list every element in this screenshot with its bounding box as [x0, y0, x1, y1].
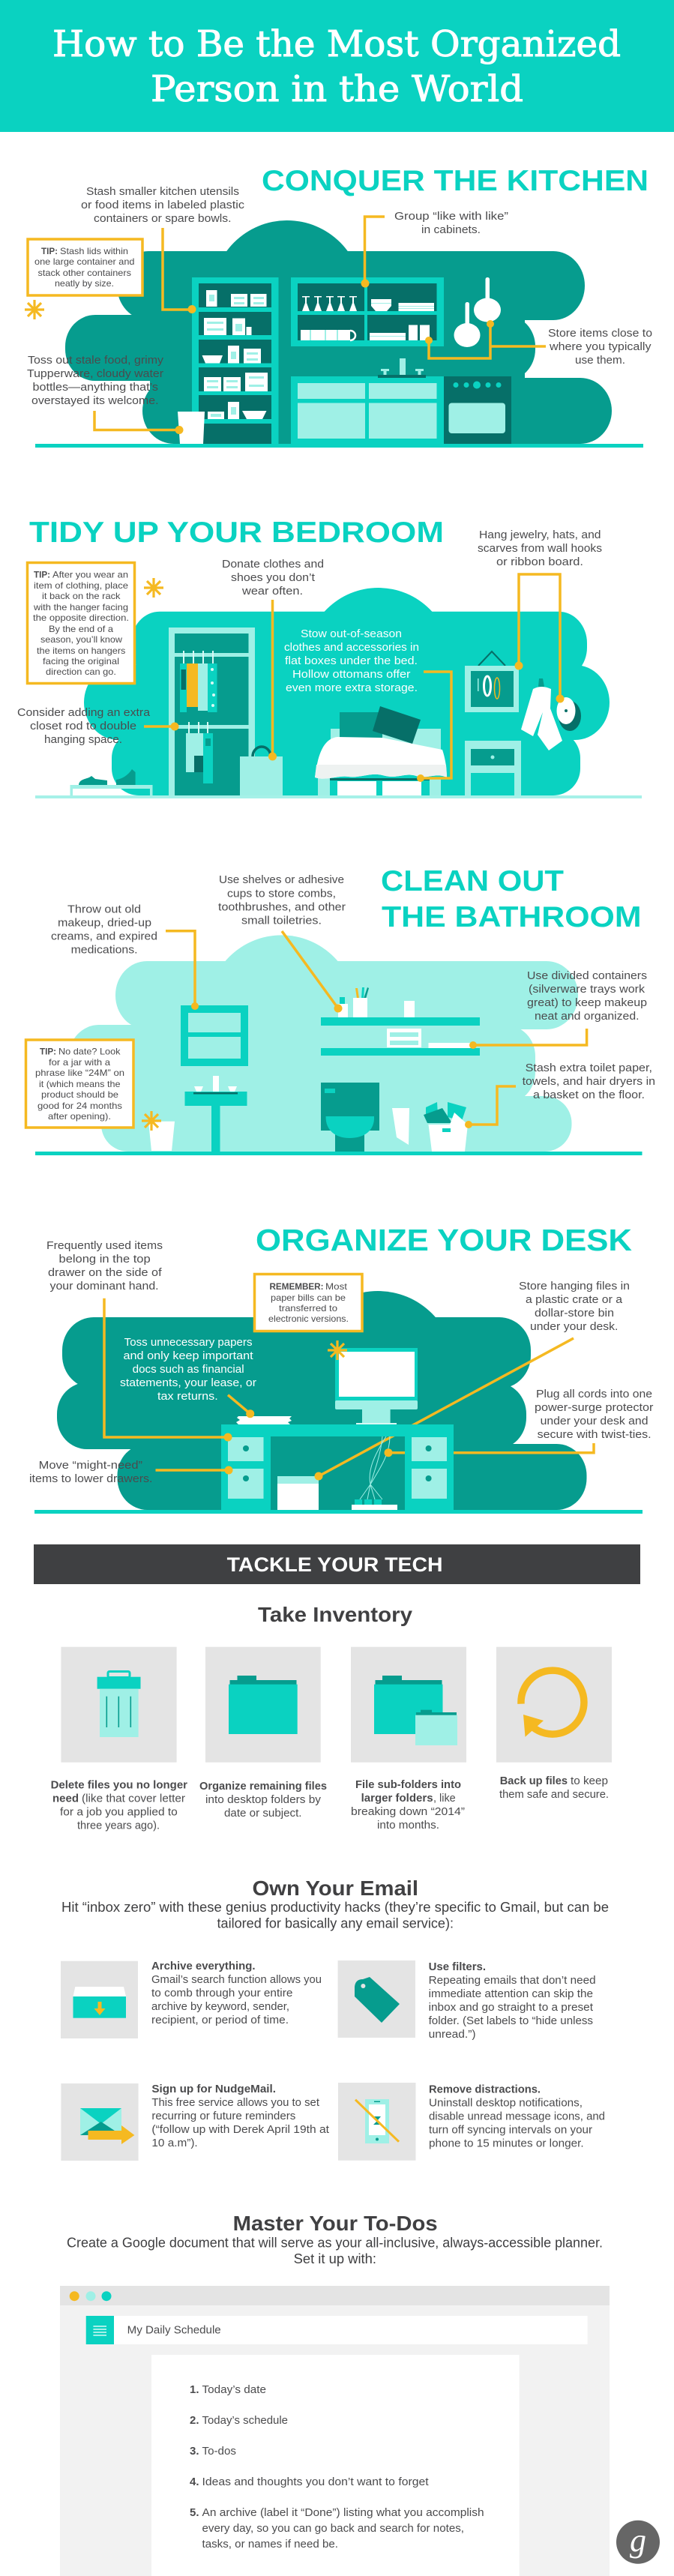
panel: take inventory [51, 1603, 612, 1832]
text: nudgemail: Sign up for NudgeMail. [151, 2083, 276, 2095]
document title bar: My Daily Schedule [127, 2324, 221, 2337]
floor line: bathroom [35, 1152, 642, 1155]
text: frequently used items [46, 1239, 163, 1292]
text: use filters: unread.”) [429, 2028, 476, 2041]
text: stash toilet paper: Stash extra toilet paper, [526, 1062, 652, 1074]
text: toss unnecessary papers: tax returns. [157, 1390, 218, 1403]
tip box: stash lids: neatly by size. [55, 278, 114, 289]
text: hang jewelry: Hang jewelry, hats, and [479, 529, 601, 541]
text: frequently used items: belong in the top [58, 1253, 151, 1266]
text: remove distractions: Remove distractions. [429, 2083, 541, 2096]
text: donate clothes [222, 558, 324, 598]
text: use filters [429, 1960, 596, 2041]
intro text: to-dos: Create a Google document that will serve as your all-inclusive, always-accessible planner. [67, 2236, 603, 2251]
cloud background: bathroom [69, 935, 578, 1152]
text: organize remaining files: into desktop folders by [205, 1793, 322, 1806]
text: extra closet rod: closet rod to double [30, 720, 136, 732]
document page with numbered list: An archive (label it “Done”) listing what you accomplish [202, 2506, 484, 2519]
text: plug all cords: Plug all cords into one [536, 1388, 652, 1400]
document page with numbered list: 1. [190, 2383, 199, 2396]
intro text: email: tailored for basically any email service): [217, 1916, 454, 1931]
text: store hanging files: dollar-store bin [535, 1307, 614, 1319]
tip box: hanger trick: with the hanger facing [33, 602, 128, 613]
text: nudgemail: recurring or future reminders [151, 2110, 295, 2122]
stove [444, 376, 511, 444]
text: nudgemail: This free service allows you to set [151, 2096, 320, 2109]
tip box: no date: No date? Look [58, 1047, 121, 1057]
intro text: to-dos [67, 2236, 603, 2266]
text: toss unnecessary papers [120, 1336, 256, 1403]
text: store items close: where you typically [549, 340, 652, 353]
tip box: no date: after opening). [48, 1111, 111, 1122]
text: toss unnecessary papers: Toss unnecessary papers [124, 1336, 252, 1349]
text: back up files: to keep [571, 1775, 608, 1787]
panel: clean out the bathroom [25, 865, 655, 1155]
icon: asterisk [144, 578, 163, 598]
card: nested folders icon [351, 1647, 466, 1763]
text: back up files: Back up files [500, 1775, 568, 1787]
panel: own your email [61, 1877, 609, 2161]
cloud background: kitchen [65, 220, 612, 444]
picture frame with jewelry [465, 651, 519, 712]
document page with numbered list [151, 2355, 520, 2576]
callout lines: kitchen [94, 217, 546, 434]
floor line: kitchen [35, 444, 643, 448]
text: store items close: Store items close to [548, 327, 652, 340]
text: stow out-of-season [284, 628, 419, 694]
tip box: no date: it (which means the [39, 1079, 121, 1089]
text: toss out stale food: overstayed its welcome. [31, 394, 159, 407]
text: frequently used items: your dominant hand. [49, 1280, 159, 1292]
banner: tackle your tech: TACKLE YOUR TECH [227, 1553, 442, 1576]
text: use shelves: cups to store combs, [227, 888, 336, 900]
icon: asterisk [328, 1340, 347, 1360]
intro text: email [61, 1900, 609, 1931]
text: might-need items [29, 1459, 153, 1485]
title banner [0, 0, 674, 132]
text: toss out stale food: Toss out stale food, grimy [28, 354, 164, 367]
text: frequently used items: Frequently used items [46, 1239, 163, 1252]
text: file sub-folders: , like [433, 1792, 456, 1805]
remember box: paper bills can be [271, 1292, 346, 1303]
heading: conquer the kitchen: CONQUER THE KITCHEN [262, 165, 649, 197]
tip box: hanger trick: item of clothing, place [34, 580, 128, 591]
medicine cabinet [181, 1005, 248, 1066]
text: throw out old makeup: creams, and expired [51, 930, 157, 943]
text: archive everything: archive by keyword, sender, [151, 2000, 289, 2013]
remember box [255, 1275, 362, 1331]
text: stow out-of-season: Stow out-of-season [301, 628, 402, 640]
text: delete files: for a job you applied to [60, 1806, 178, 1819]
text: divided containers: neat and organized. [535, 1010, 639, 1023]
text: extra closet rod: Consider adding an extra [17, 706, 151, 719]
tip box: stash lids [28, 239, 142, 295]
remember box: electronic versions. [268, 1313, 349, 1324]
text: donate clothes: shoes you don’t [231, 571, 316, 584]
text: use filters: Use filters. [429, 1960, 486, 1973]
monitor [335, 1348, 418, 1424]
callout lines: bathroom [166, 931, 587, 1128]
text: archive everything: recipient, or period of time. [151, 2014, 289, 2026]
document page with numbered list: 3. [190, 2445, 199, 2458]
panel: master your to-dos [60, 2212, 610, 2576]
callout lines: desk [104, 1298, 393, 1480]
document title bar [86, 2316, 588, 2344]
text: stash utensils [81, 185, 245, 225]
text: stow out-of-season: clothes and accessories in [284, 641, 419, 654]
callout lines behind desk [319, 1338, 594, 1476]
cloud background: desk [57, 1291, 586, 1510]
text: use shelves: Use shelves or adhesive [219, 873, 344, 886]
tip box: hanger trick: the opposite direction. [33, 613, 129, 623]
text: file sub-folders: into months. [377, 1819, 439, 1832]
text: throw out old makeup: makeup, dried-up [58, 917, 151, 930]
text: extra closet rod: hanging space. [44, 733, 122, 746]
icon: donation bag [240, 747, 283, 795]
text: store hanging files: under your desk. [530, 1320, 618, 1333]
heading: clean out the bathroom: THE BATHROOM [382, 901, 642, 933]
tip box: no date: good for 24 months [37, 1101, 122, 1111]
tip box: no date [25, 1040, 133, 1128]
document page with numbered list: every day, so you can go back and search for notes, [202, 2522, 464, 2535]
remember box: transferred to [279, 1303, 337, 1313]
text: divided containers: (silverware trays work [529, 983, 646, 996]
tip box: stash lids: TIP: [41, 246, 58, 256]
card: remove distractions [338, 2083, 415, 2161]
icon: asterisk [25, 300, 44, 319]
pedestal sink [184, 1076, 247, 1152]
text: toss out stale food: Tupperware, cloudy water [27, 367, 163, 380]
text: organize remaining files: date or subject. [224, 1807, 301, 1820]
document page with numbered list: Today’s schedule [202, 2414, 288, 2427]
text: delete files: need [52, 1793, 79, 1805]
cloud background: bedroom [84, 588, 610, 795]
tip box: stash lids: stack other containers [37, 268, 131, 278]
text: hang jewelry [478, 529, 602, 568]
icon: trash can [178, 412, 205, 444]
tip box: stash lids: one large container and [34, 256, 135, 267]
toilet [321, 1083, 379, 1152]
text: store items close [548, 327, 652, 367]
title banner: How to Be the Most Organized [52, 23, 621, 65]
heading: own your email: Own Your Email [252, 1877, 418, 1900]
text: throw out old makeup [51, 903, 157, 957]
tip box: no date: for a jar with a [49, 1057, 110, 1068]
text: archive everything: Archive everything. [151, 1960, 255, 1972]
tip box: hanger trick: TIP: [34, 570, 50, 580]
document page with numbered list: To-dos [202, 2445, 236, 2458]
panel: organize your desk [29, 1223, 653, 1514]
text: group like with like: Group “like with like” [394, 210, 508, 223]
text: use filters: inbox and go straight to a preset [429, 2001, 594, 2014]
closet with hanging clothes [169, 628, 255, 795]
text: stow out-of-season: Hollow ottomans offer [292, 668, 411, 681]
document page with numbered list: tasks, or names if need be. [202, 2538, 338, 2551]
text: stash toilet paper: a basket on the floor. [533, 1089, 645, 1101]
logo: greatist g [616, 2521, 660, 2564]
text: stash toilet paper [523, 1062, 655, 1101]
tip box: no date: phrase like “24M” on [35, 1068, 124, 1078]
text: file sub-folders [351, 1778, 465, 1832]
text: nudgemail [151, 2083, 330, 2149]
text: remove distractions: phone to 15 minutes or longer. [429, 2137, 584, 2150]
icon: towel [392, 1108, 409, 1145]
text: use shelves: toothbrushes, and other [218, 901, 346, 914]
tall pantry shelving [192, 277, 279, 444]
text: toss unnecessary papers: docs such as financial [133, 1363, 244, 1376]
shelves with toiletries [321, 987, 480, 1056]
text: might-need items: items to lower drawers. [29, 1472, 153, 1485]
text: archive everything [151, 1960, 322, 2026]
nightstand [465, 741, 521, 795]
remember box: Most [325, 1281, 348, 1292]
text: store items close: use them. [575, 354, 625, 367]
text: file sub-folders: File sub-folders into [355, 1778, 461, 1791]
text: frequently used items: drawer on the side of [48, 1266, 162, 1279]
heading: take inventory: Take Inventory [258, 1603, 412, 1626]
text: use filters: Repeating emails that don’t need [429, 1974, 596, 1987]
icon: scarf and hat [521, 678, 581, 750]
bed with pillows and storage boxes [315, 706, 447, 795]
text: archive everything: Gmail’s search function allows you [151, 1973, 322, 1986]
text: toss out stale food [27, 354, 164, 407]
text: remove distractions [429, 2083, 605, 2150]
text: stash toilet paper: towels, and hair dryers in [523, 1075, 655, 1088]
text: remove distractions: Uninstall desktop notifications, [429, 2097, 583, 2110]
lower cabinet and sink [291, 358, 444, 444]
text: donate clothes: Donate clothes and [222, 558, 324, 571]
tip box: hanger trick: After you wear an [52, 570, 128, 580]
text: use filters: immediate attention can skip the [429, 1987, 593, 2000]
card: trash icon [61, 1647, 177, 1763]
text: delete files: three years ago). [77, 1820, 160, 1832]
heading: master your to-dos: Master Your To-Dos [233, 2212, 438, 2235]
remember box: REMEMBER: [270, 1281, 324, 1292]
power strip [352, 1499, 397, 1510]
text: file sub-folders: larger folders [361, 1792, 433, 1805]
text: store hanging files [519, 1280, 630, 1333]
text: use filters: folder. (Set labels to “hide unless [429, 2014, 593, 2027]
text: might-need items: Move “might-need” [39, 1459, 142, 1472]
heading: clean out the bathroom: CLEAN OUT [381, 865, 564, 897]
text: use shelves [218, 873, 346, 927]
intro text: email: Hit “inbox zero” with these genius productivity hacks (they’re specific to Gmail, but can be [61, 1900, 609, 1915]
icon: basket with supplies [424, 1102, 468, 1152]
text: organize remaining files [199, 1780, 327, 1820]
tip box: hanger trick: By the end of a [49, 624, 113, 634]
heading: clean out the bathroom [381, 865, 642, 933]
text: delete files: Delete files you no longer [51, 1779, 187, 1792]
text: delete files [51, 1779, 187, 1832]
intro text: to-dos: Set it up with: [294, 2251, 376, 2266]
text: hang jewelry: or ribbon board. [496, 556, 583, 568]
heading: tidy up your bedroom: TIDY UP YOUR BEDROOM [29, 517, 444, 549]
document page with numbered list: 2. [190, 2414, 199, 2427]
desk with drawers [221, 1424, 454, 1510]
tip box: no date: TIP: [40, 1047, 56, 1057]
hanging file bin [277, 1476, 319, 1510]
text: remove distractions: disable unread message icons, and [429, 2110, 605, 2123]
icon: bathroom trash can [148, 1122, 175, 1151]
text: divided containers [527, 969, 647, 1023]
text: plug all cords: secure with twist-ties. [538, 1428, 652, 1441]
panel: conquer the kitchen [25, 165, 652, 448]
text: file sub-folders: breaking down “2014” [351, 1805, 465, 1818]
tip box: hanger trick [27, 562, 135, 684]
text: store hanging files: Store hanging files in [519, 1280, 630, 1292]
text: store hanging files: a plastic crate or a [526, 1293, 623, 1306]
text: plug all cords: power-surge protector [535, 1401, 653, 1414]
shoe rack with shoes [70, 769, 153, 795]
text: group like with like [394, 210, 508, 236]
text: use shelves: small toiletries. [241, 915, 322, 927]
card: archive everything [61, 1961, 138, 2038]
cords [360, 1436, 390, 1499]
text: extra closet rod [17, 706, 151, 746]
callout lines: bedroom [144, 574, 564, 782]
text: stash utensils: Stash smaller kitchen utensils [86, 185, 239, 198]
text: nudgemail: (“follow up with Derek April 19th at [151, 2123, 330, 2136]
text: divided containers: Use divided containers [527, 969, 647, 982]
tip box: no date: product should be [41, 1089, 118, 1100]
title banner: Person in the World [151, 68, 523, 110]
text: donate clothes: wear often. [241, 585, 303, 598]
text: throw out old makeup: medications. [71, 944, 138, 957]
stack of papers [236, 1416, 292, 1424]
tip box: hanger trick: direction can go. [46, 666, 116, 677]
card: use filters [338, 1960, 415, 2038]
text: hang jewelry: scarves from wall hooks [478, 542, 602, 555]
tip box: hanger trick: it back on the rack [42, 591, 121, 601]
document page with numbered list: 4. [190, 2476, 199, 2488]
card: backup icon [496, 1647, 612, 1763]
text: stash utensils: containers or spare bowls. [94, 212, 231, 225]
text: toss out stale food: bottles—anything that’s [33, 381, 158, 394]
text: remove distractions: turn off syncing intervals on your [429, 2124, 592, 2137]
text: plug all cords: under your desk and [541, 1415, 648, 1427]
heading: organize your desk: ORGANIZE YOUR DESK [256, 1223, 632, 1257]
text: nudgemail: 10 a.m”). [151, 2137, 198, 2149]
text: stow out-of-season: even more extra storage. [286, 681, 418, 694]
tip box: stash lids: Stash lids within [60, 246, 128, 256]
text: plug all cords [535, 1388, 653, 1441]
document page with numbered list: Ideas and thoughts you don’t want to forget [202, 2476, 429, 2488]
text: archive everything: to comb through your entire [151, 1987, 292, 1999]
card: folder icon [205, 1647, 321, 1763]
text: organize remaining files: Organize remaining files [199, 1780, 327, 1793]
text: toss unnecessary papers: statements, your lease, or [120, 1376, 256, 1389]
document page with numbered list: 5. [190, 2506, 199, 2519]
tip box: hanger trick: season, you’ll know [40, 634, 122, 645]
text: delete files: (like that cover letter [82, 1793, 185, 1805]
browser window [60, 2286, 610, 2576]
text: stash utensils: or food items in labeled plastic [81, 199, 245, 211]
text: back up files [499, 1775, 609, 1801]
panel: tidy up your bedroom [17, 517, 642, 798]
card: nudgemail [61, 2083, 139, 2161]
document page with numbered list: Today’s date [202, 2383, 266, 2396]
tip box: hanger trick: facing the original [43, 656, 119, 666]
floor line: desk [34, 1510, 643, 1514]
upper cabinet with glasses and dishes [291, 277, 444, 346]
banner: tackle your tech [34, 1544, 640, 1584]
text: back up files: them safe and secure. [499, 1788, 609, 1801]
tip box: hanger trick: the items on hangers [37, 645, 125, 656]
icon: asterisk [142, 1111, 161, 1131]
logo: greatist g: g [630, 2522, 646, 2559]
text: toss unnecessary papers: and only keep important [123, 1349, 254, 1362]
text: stow out-of-season: flat boxes under the bed. [285, 654, 418, 667]
text: throw out old makeup: Throw out old [67, 903, 141, 916]
text: divided containers: great) to keep makeup [527, 996, 647, 1009]
text: group like with like: in cabinets. [421, 223, 481, 236]
floor line: bedroom [35, 795, 642, 798]
icon: hanging pans [454, 277, 501, 347]
